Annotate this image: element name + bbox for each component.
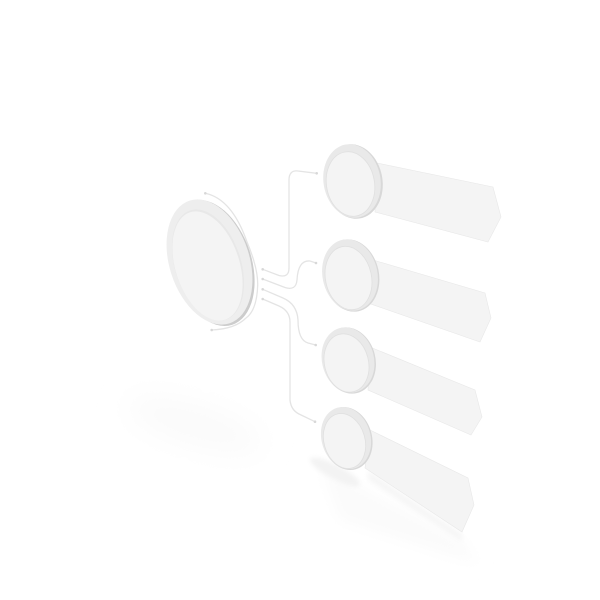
connector end dots [204,172,318,423]
ribbon 4 [365,430,474,532]
item 2 [316,234,491,342]
circle 4 [314,401,380,476]
item 1 [318,140,501,242]
arc around main disk [205,193,258,330]
ribbon 2 [368,260,491,342]
main disk [152,188,270,337]
ribbon 1 [375,163,501,242]
floor shadows [122,385,480,565]
item 4 [314,401,474,532]
line to item 3 [263,289,316,345]
item 3 [315,322,482,435]
line to item 1 [263,171,317,276]
line to item 2 [263,261,316,288]
circle 2 [316,234,386,317]
line to item 4 [263,299,315,422]
ribbon 3 [368,347,482,435]
circle 3 [315,322,383,399]
connector lines [205,171,317,422]
circle 1 [318,140,389,223]
